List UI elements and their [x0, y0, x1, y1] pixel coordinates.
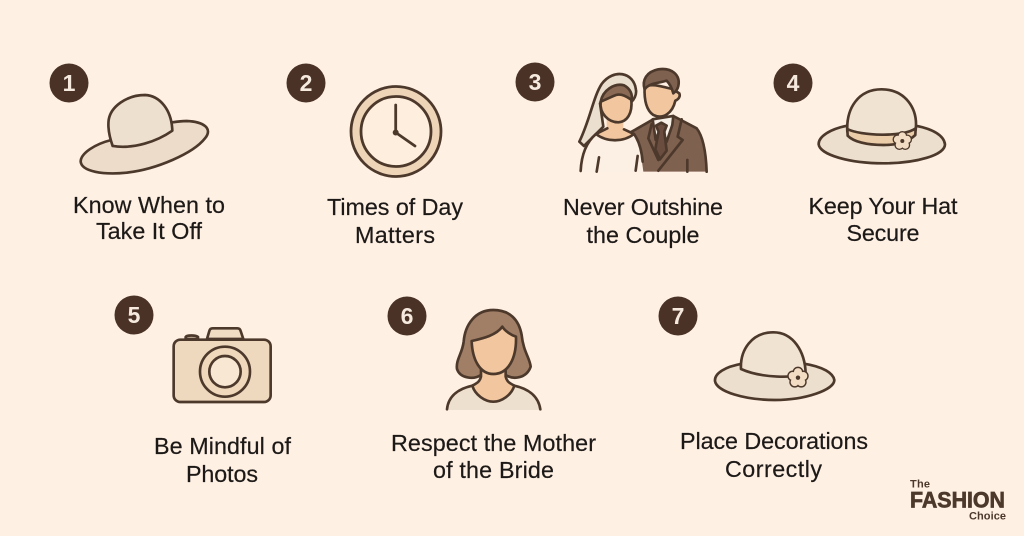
icon: hat with band and flower [819, 89, 945, 163]
item 4: keep your hat secure [774, 64, 958, 246]
label: Respect the Mother [391, 430, 596, 456]
label: Secure [846, 220, 920, 246]
label: Know When to [73, 192, 225, 218]
icon: woman portrait [447, 310, 540, 410]
groom face [645, 85, 680, 117]
bride hair [601, 85, 632, 102]
badge 7: 7 [672, 303, 684, 329]
label [563, 194, 723, 248]
icon: camera [174, 328, 271, 402]
icon: tilted hat [81, 95, 208, 173]
label: of the Bride [433, 457, 554, 483]
groom tie [655, 123, 667, 159]
face [472, 327, 516, 374]
bride neck [596, 119, 634, 140]
label: Be Mindful of [154, 433, 292, 459]
label: Matters [355, 222, 435, 248]
label [391, 430, 596, 483]
label: the Couple [586, 222, 700, 248]
item 2: times of day [286, 64, 463, 248]
label: Correctly [725, 456, 822, 482]
bride dress [581, 134, 642, 172]
logo: The Fashion Choice: Choice [969, 510, 1006, 522]
neck [472, 367, 514, 402]
logo: The Fashion Choice: The [910, 478, 930, 490]
icon: clock [351, 86, 441, 176]
badge 4 [774, 64, 812, 102]
logo: The Fashion Choice: FASHION [910, 488, 1005, 512]
badge 5 [114, 296, 154, 334]
item 1: know when to take it off [50, 64, 225, 244]
label: Photos [186, 461, 258, 487]
badge 4: 4 [787, 70, 800, 96]
badge 2: 2 [300, 70, 312, 96]
badge 3: 3 [529, 69, 541, 95]
bride face [601, 94, 632, 122]
badge 7 [658, 296, 698, 336]
item 7: place decorations correctly [658, 296, 868, 482]
label [327, 194, 463, 248]
label [680, 428, 868, 482]
top [447, 385, 540, 410]
flower [789, 368, 807, 386]
badge 6: 6 [401, 303, 413, 329]
label: Times of Day [327, 194, 463, 220]
badge 3 [516, 62, 554, 102]
bride veil [579, 74, 636, 146]
icon: hat with flower [715, 332, 834, 400]
label: Take It Off [96, 218, 203, 244]
item 3: never outshine the couple [516, 62, 723, 248]
badge 6 [388, 296, 426, 336]
groom hair [644, 69, 679, 93]
label [808, 193, 958, 246]
groom suit [630, 116, 707, 172]
groom shirt [653, 116, 673, 142]
label: Place Decorations [680, 428, 868, 454]
badge 1: 1 [63, 70, 76, 96]
label: Keep Your Hat [808, 193, 958, 219]
label [154, 433, 292, 487]
icon: bride and groom [579, 69, 707, 172]
logo: The Fashion Choice [910, 478, 1006, 522]
label [73, 192, 225, 244]
badge 5: 5 [128, 302, 141, 328]
hair [457, 310, 531, 378]
badge 2 [286, 64, 326, 102]
flower [894, 132, 911, 149]
item 6: respect the mother of the bride [388, 296, 596, 483]
label: Never Outshine [563, 194, 723, 220]
item 5: be mindful of photos [114, 296, 292, 487]
badge 1 [50, 64, 88, 102]
